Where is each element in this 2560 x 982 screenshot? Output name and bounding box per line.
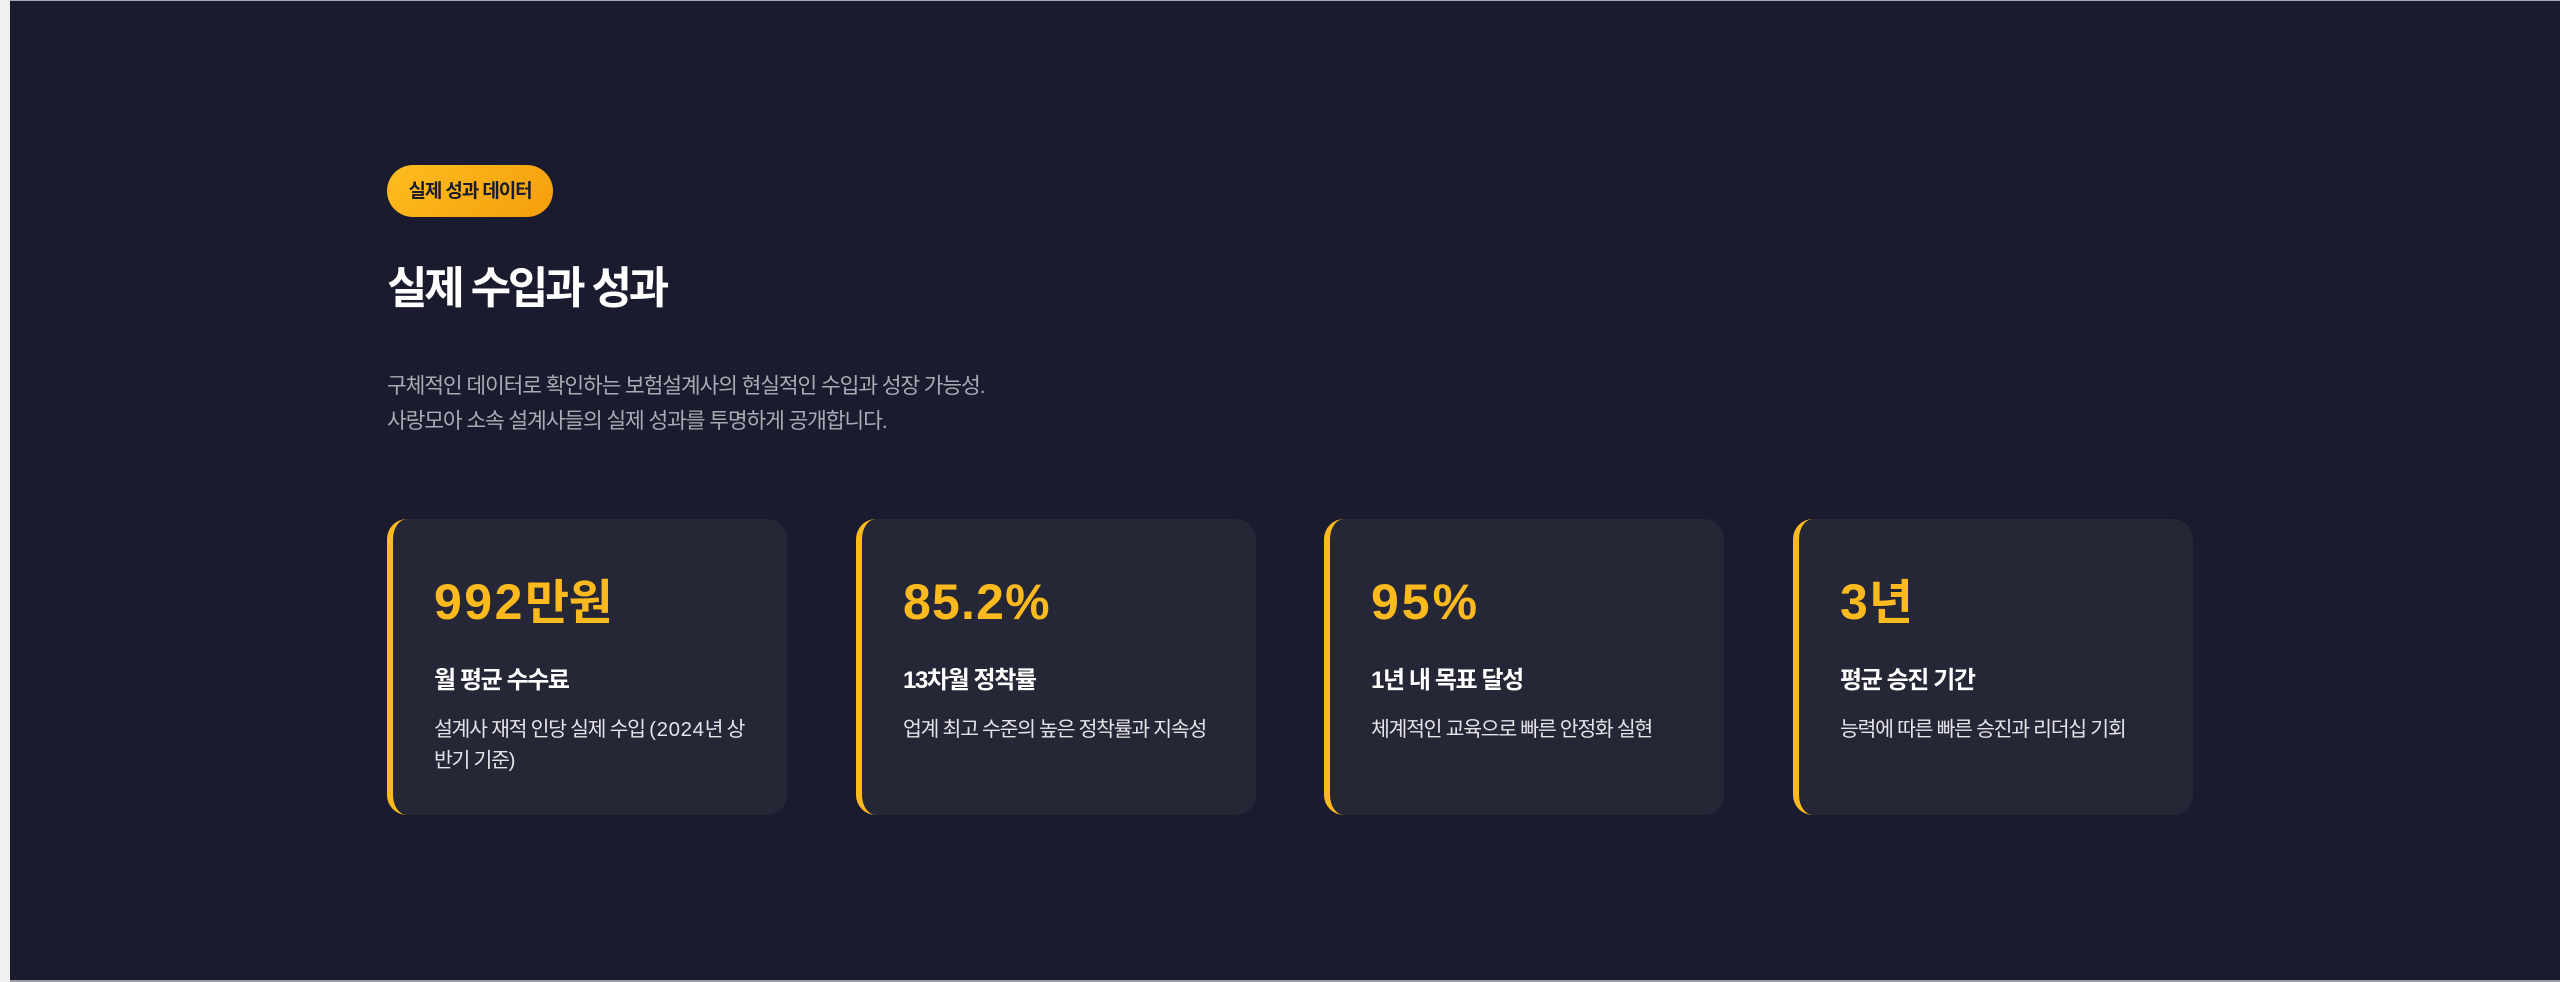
panel: stat card monthly commission xyxy=(387,519,787,815)
stat description: 설계사 재적 인당 실제 수입 (2024년 상 xyxy=(434,718,744,741)
stat value: 992만원 xyxy=(434,574,612,630)
badge: 실제 성과 데이터 xyxy=(408,181,532,202)
title: 실제 수입과 성과 xyxy=(387,264,666,313)
stat value: 95% xyxy=(1371,574,1480,630)
badge xyxy=(387,165,553,217)
stat description xyxy=(434,718,745,772)
stat value: 3년 xyxy=(1840,574,1911,630)
panel: stat card promotion period xyxy=(1793,519,2193,815)
stat description: 체계적인 교육으로 빠른 안정화 실현 xyxy=(1371,718,1652,741)
stat title: 평균 승진 기간 xyxy=(1840,667,1975,694)
stat title: 13차월 정착률 xyxy=(903,667,1036,694)
bottom edge line xyxy=(10,980,2560,982)
top edge line xyxy=(10,0,2560,1)
stat description: 반기 기준) xyxy=(434,749,514,772)
stat title: 월 평균 수수료 xyxy=(434,667,569,694)
description text: 사랑모아 소속 설계사들의 실제 성과를 투명하게 공개합니다. xyxy=(387,409,887,433)
panel: stat card retention xyxy=(856,519,1256,815)
stat title: 1년 내 목표 달성 xyxy=(1371,667,1523,694)
description text xyxy=(387,374,984,433)
stat value: 85.2% xyxy=(903,574,1051,630)
panel: stat card goal achievement xyxy=(1324,519,1724,815)
description text: 구체적인 데이터로 확인하는 보험설계사의 현실적인 수입과 성장 가능성. xyxy=(387,374,984,398)
stat description: 능력에 따른 빠른 승진과 리더십 기회 xyxy=(1840,718,2125,741)
stat description: 업계 최고 수준의 높은 정착률과 지속성 xyxy=(903,718,1206,741)
